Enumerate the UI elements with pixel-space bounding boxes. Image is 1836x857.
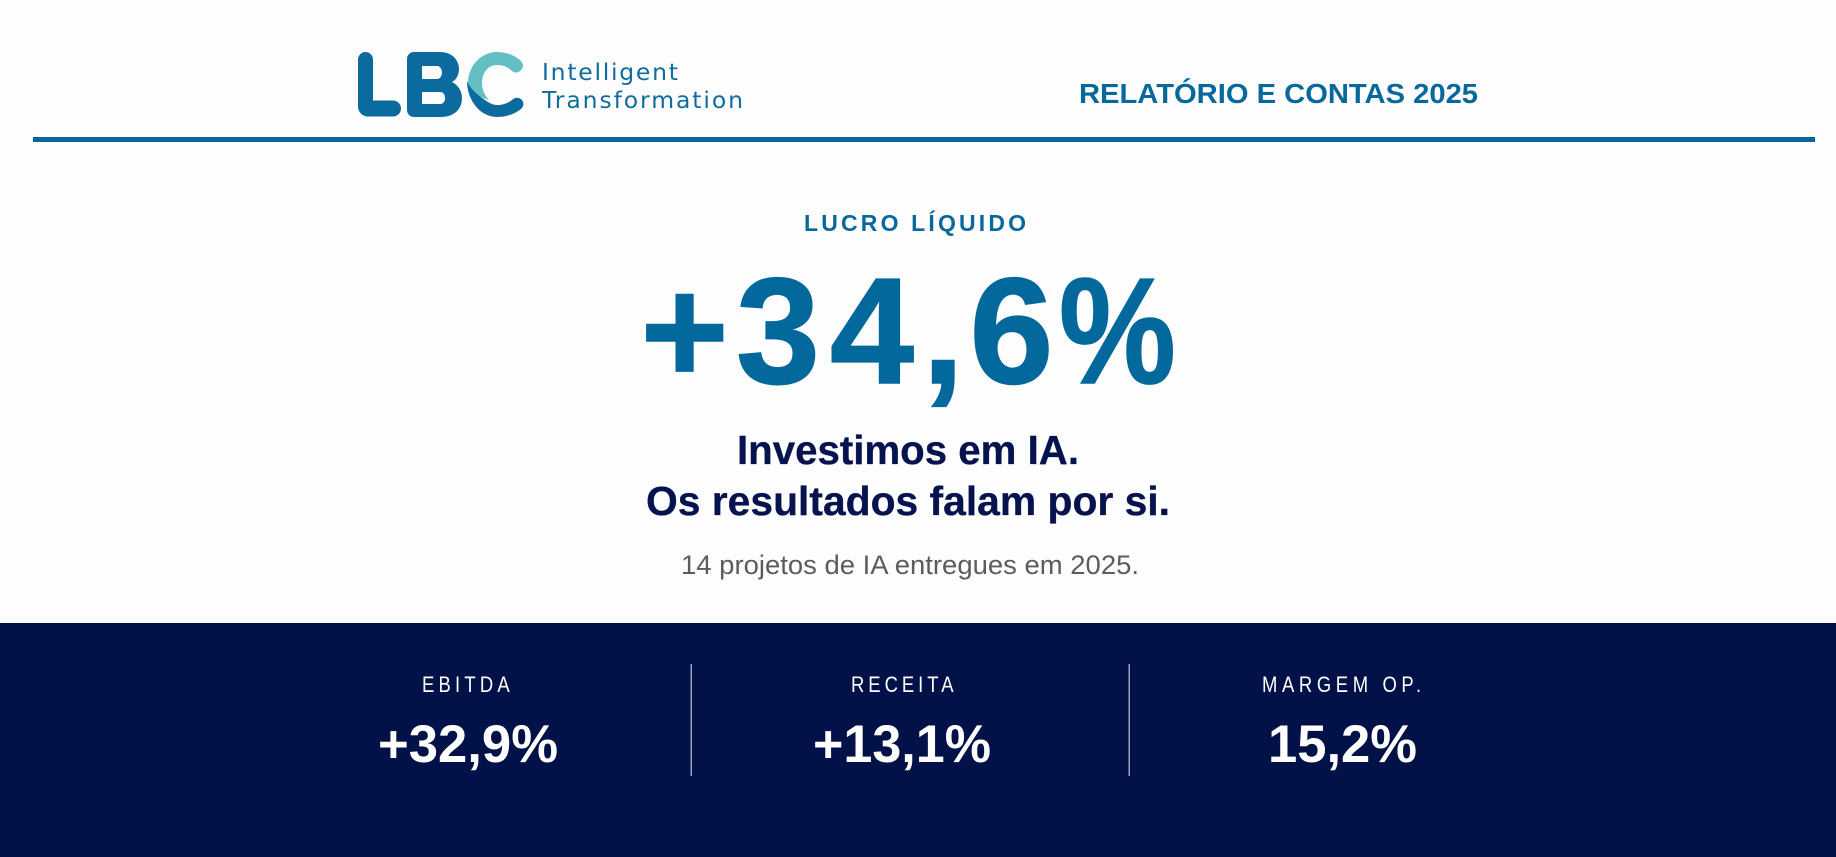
logo letter C dark arc [467, 81, 523, 117]
main panel: net profit [640, 209, 1176, 580]
logo letter C teal arc [468, 52, 523, 100]
metric: EBITDA [378, 672, 558, 774]
logo letter B [407, 52, 462, 117]
metric: RECEITA: +13,1% [813, 715, 991, 774]
metric: RECEITA [813, 672, 991, 774]
subtext: 14 projetos de IA entregues em 2025. [681, 550, 1139, 580]
headline: Os resultados falam por si. [646, 478, 1170, 524]
headline [646, 427, 1170, 524]
header rule [33, 137, 1815, 142]
header [33, 52, 1815, 142]
metric: MARGEM OP.: MARGEM OP. [1262, 672, 1421, 697]
report title: RELATÓRIO E CONTAS 2025 [1079, 78, 1478, 109]
kicker label: LUCRO LÍQUIDO [804, 209, 1026, 236]
footer band [0, 623, 1836, 857]
divider [1128, 664, 1130, 776]
logo: LBC Intelligent Transformation [358, 52, 743, 117]
logo text: Transformation [541, 86, 743, 114]
metric: RECEITA: RECEITA [851, 672, 954, 697]
metric: EBITDA: +32,9% [378, 715, 558, 774]
metric: MARGEM OP.: 15,2% [1268, 715, 1417, 774]
metric: EBITDA: EBITDA [422, 672, 510, 697]
logo letter L [358, 52, 401, 116]
metric: MARGEM OP. [1262, 672, 1421, 774]
logo text: Intelligent [542, 58, 678, 86]
divider [690, 664, 692, 776]
logo text [541, 58, 743, 114]
headline: Investimos em IA. [737, 427, 1079, 473]
big number: +34,6 [640, 246, 1053, 415]
big number: % [1059, 246, 1176, 415]
